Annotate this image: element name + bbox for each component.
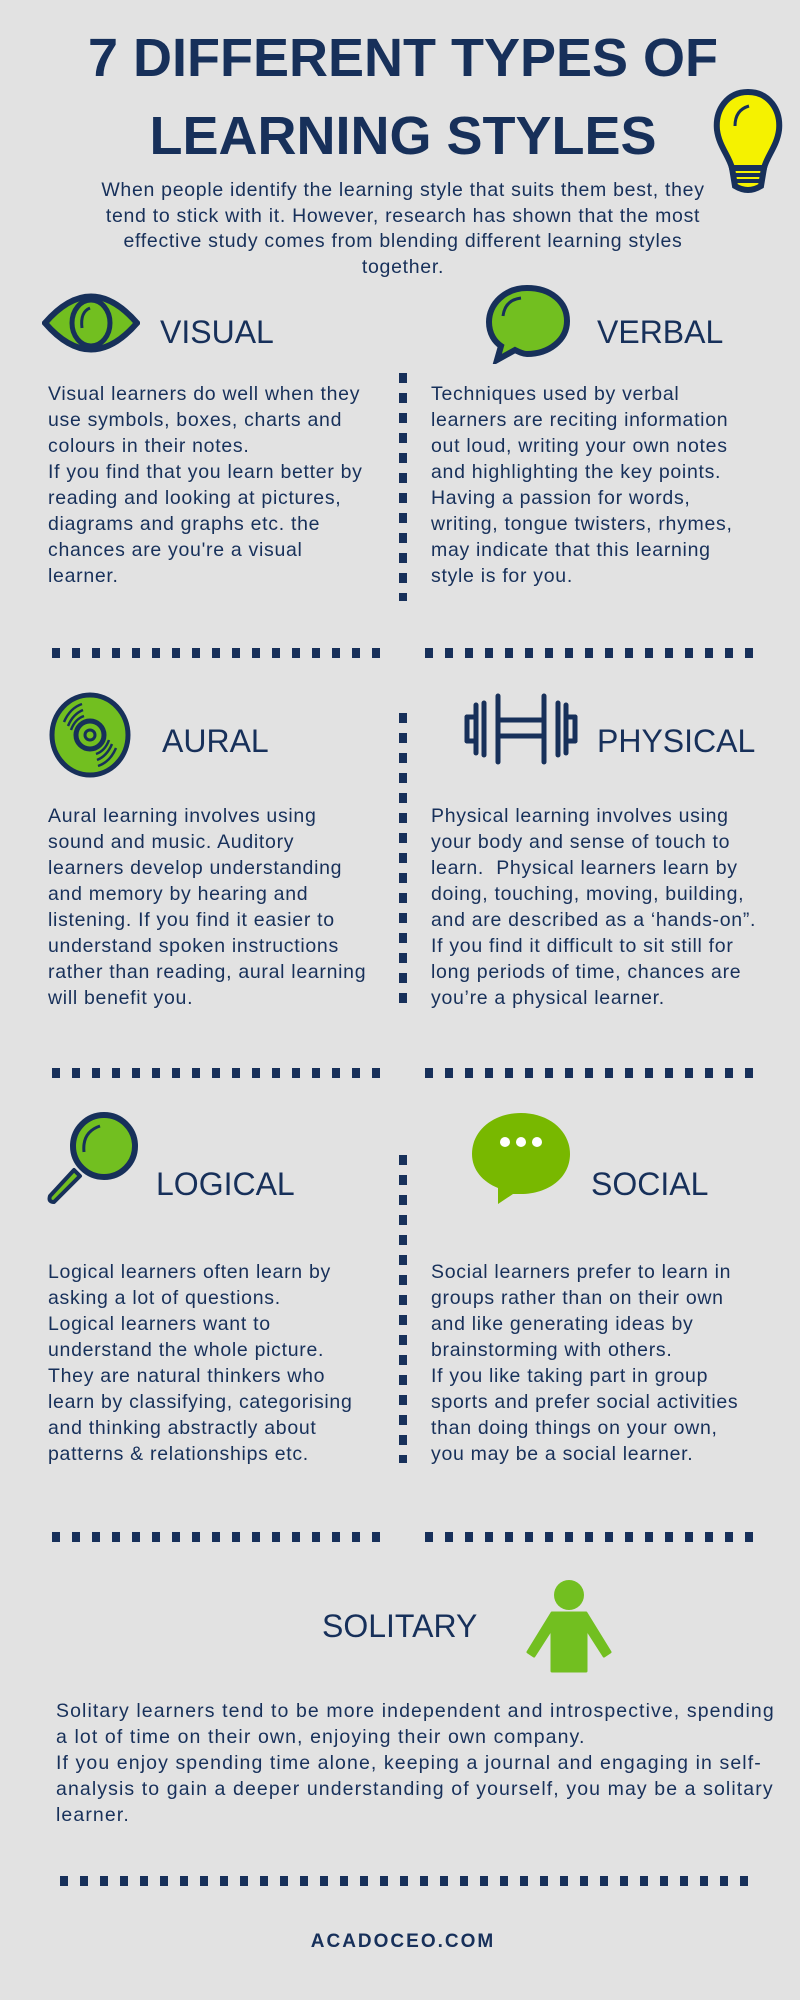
text: social: sports and prefer social activities bbox=[431, 1391, 738, 1413]
text: logical: patterns & relationships etc. bbox=[48, 1443, 309, 1465]
title: 7 DIFFERENT TYPES OF bbox=[88, 28, 718, 88]
icon: dumbbell bbox=[464, 694, 578, 764]
text: aural: will benefit you. bbox=[48, 987, 193, 1009]
text: social: and like generating ideas by bbox=[431, 1313, 693, 1335]
intro text: tend to stick with it. However, research has shown that the most bbox=[106, 204, 700, 226]
text: physical: doing, touching, moving, building, bbox=[431, 883, 744, 905]
text: visual bbox=[48, 383, 363, 587]
text: aural bbox=[48, 805, 366, 1009]
text: solitary: a lot of time on their own, enjoying their own company. bbox=[56, 1726, 585, 1748]
title bbox=[88, 28, 718, 166]
text: aural: learners develop understanding bbox=[48, 857, 342, 879]
text: logical: asking a lot of questions. bbox=[48, 1287, 281, 1309]
text: logical: learn by classifying, categorising bbox=[48, 1391, 353, 1413]
heading: physical: PHYSICAL bbox=[597, 723, 755, 759]
text: verbal bbox=[431, 383, 733, 587]
text: verbal: learners are reciting information bbox=[431, 409, 728, 431]
icon: chat bubble bbox=[472, 1113, 570, 1204]
text: aural: sound and music. Auditory bbox=[48, 831, 294, 853]
text: logical: They are natural thinkers who bbox=[48, 1365, 325, 1387]
text: physical: If you find it difficult to sit still for bbox=[431, 935, 734, 957]
panel: solitary bbox=[56, 1580, 775, 1826]
text: social: you may be a social learner. bbox=[431, 1443, 693, 1465]
icon: disc bbox=[50, 692, 130, 778]
text: verbal: and highlighting the key points. bbox=[431, 461, 721, 483]
icon: speech bubble bbox=[486, 285, 570, 364]
text: visual: reading and looking at pictures, bbox=[48, 487, 341, 509]
text: solitary: Solitary learners tend to be more independent and introspective, spending bbox=[56, 1700, 775, 1722]
intro text: When people identify the learning style that suits them best, they bbox=[101, 179, 705, 201]
panel: aural bbox=[48, 692, 366, 1009]
text: physical: your body and sense of touch to bbox=[431, 831, 730, 853]
text: social: If you like taking part in group bbox=[431, 1365, 708, 1387]
text: social: than doing things on your own, bbox=[431, 1417, 718, 1439]
text: solitary: learner. bbox=[56, 1804, 130, 1826]
text: physical: Physical learning involves using bbox=[431, 805, 729, 827]
heading: verbal: VERBAL bbox=[597, 314, 723, 350]
text: visual: colours in their notes. bbox=[48, 435, 249, 457]
text: visual: If you find that you learn better by bbox=[48, 461, 363, 483]
text: solitary bbox=[56, 1700, 775, 1826]
text: aural: Aural learning involves using bbox=[48, 805, 317, 827]
text: logical: and thinking abstractly about bbox=[48, 1417, 317, 1439]
text: logical: Logical learners often learn by bbox=[48, 1261, 331, 1283]
text: social: groups rather than on their own bbox=[431, 1287, 724, 1309]
panel: logical bbox=[48, 1112, 353, 1465]
intro text: effective study comes from blending different learning styles bbox=[123, 230, 682, 252]
footer: ACADOCEO.COM bbox=[311, 1931, 495, 1952]
icon: magnifier bbox=[48, 1112, 138, 1204]
text: visual: Visual learners do well when they bbox=[48, 383, 360, 405]
text: physical: you’re a physical learner. bbox=[431, 987, 665, 1009]
text: visual: chances are you're a visual bbox=[48, 539, 303, 561]
panel: physical bbox=[431, 694, 756, 1009]
text: verbal: out loud, writing your own notes bbox=[431, 435, 728, 457]
text: aural: understand spoken instructions bbox=[48, 935, 339, 957]
panel: visual bbox=[42, 294, 363, 587]
text: visual: learner. bbox=[48, 565, 119, 587]
heading: logical: LOGICAL bbox=[156, 1166, 295, 1202]
text: logical bbox=[48, 1261, 353, 1465]
text: verbal: may indicate that this learning bbox=[431, 539, 711, 561]
text: social: Social learners prefer to learn in bbox=[431, 1261, 731, 1283]
text: visual: use symbols, boxes, charts and bbox=[48, 409, 342, 431]
text: solitary: analysis to gain a deeper understanding of yourself, you may be a solitary bbox=[56, 1778, 774, 1800]
text: verbal: style is for you. bbox=[431, 565, 573, 587]
heading: visual: VISUAL bbox=[160, 314, 274, 350]
text: verbal: Techniques used by verbal bbox=[431, 383, 679, 405]
text: logical: understand the whole picture. bbox=[48, 1339, 324, 1361]
text: physical: long periods of time, chances are bbox=[431, 961, 741, 983]
text: physical: and are described as a ‘hands-on”. bbox=[431, 909, 756, 931]
text: aural: and memory by hearing and bbox=[48, 883, 308, 905]
panel: verbal bbox=[431, 285, 733, 587]
heading: aural: AURAL bbox=[162, 723, 269, 759]
icon: person bbox=[526, 1580, 612, 1672]
text: verbal: writing, tongue twisters, rhymes, bbox=[431, 513, 733, 535]
text: aural: listening. If you find it easier to bbox=[48, 909, 335, 931]
icon: eye bbox=[42, 294, 140, 352]
text: physical: learn. Physical learners learn by bbox=[431, 857, 738, 879]
icon: light bulb bbox=[714, 89, 782, 193]
title: LEARNING STYLES bbox=[149, 106, 657, 166]
heading: social: SOCIAL bbox=[591, 1166, 708, 1202]
text: aural: rather than reading, aural learning bbox=[48, 961, 366, 983]
text: solitary: If you enjoy spending time alone, keeping a journal and engaging in self- bbox=[56, 1752, 762, 1774]
intro text bbox=[101, 179, 705, 278]
intro text: together. bbox=[362, 256, 444, 278]
text: visual: diagrams and graphs etc. the bbox=[48, 513, 320, 535]
text: physical bbox=[431, 805, 756, 1009]
panel: social bbox=[431, 1113, 738, 1465]
text: social: brainstorming with others. bbox=[431, 1339, 672, 1361]
heading: solitary: SOLITARY bbox=[322, 1608, 477, 1644]
text: verbal: Having a passion for words, bbox=[431, 487, 691, 509]
text: social bbox=[431, 1261, 738, 1465]
text: logical: Logical learners want to bbox=[48, 1313, 271, 1335]
